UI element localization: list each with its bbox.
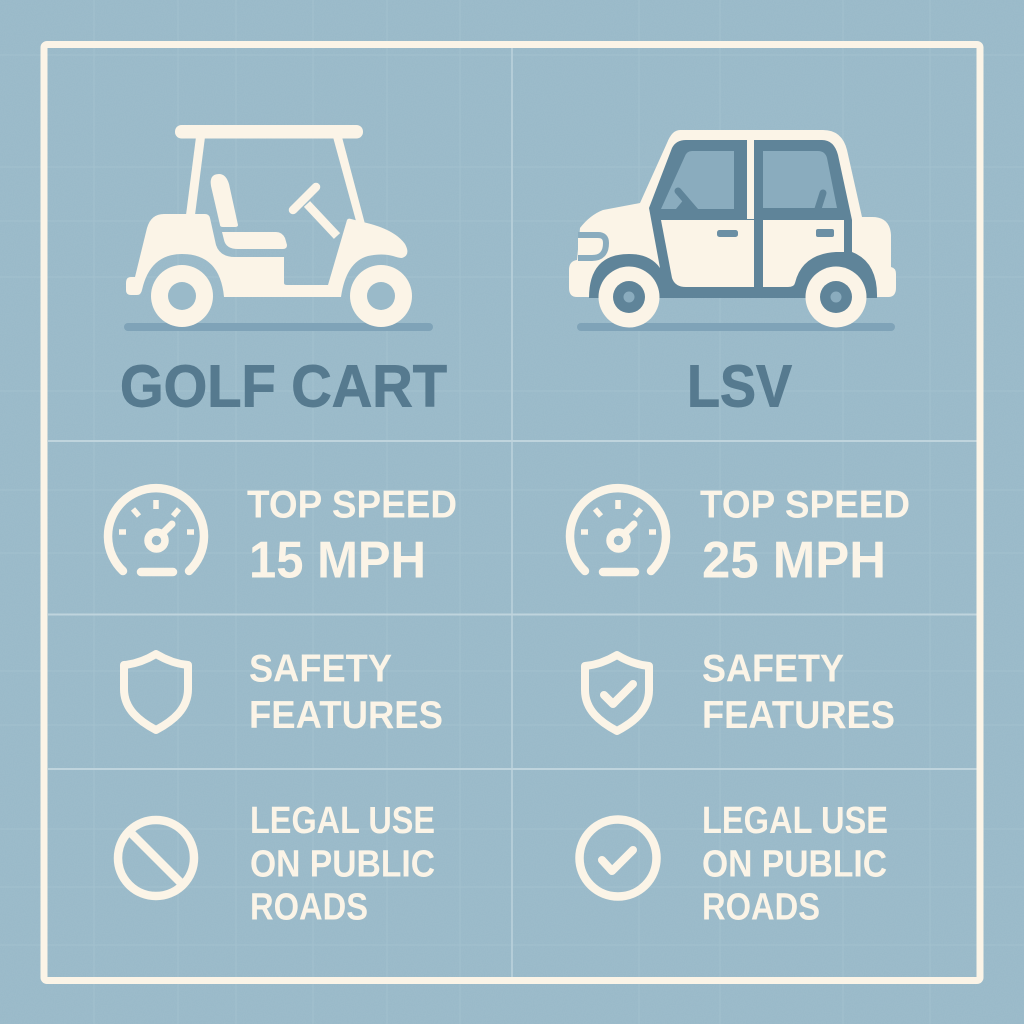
panel: LSV header xyxy=(569,130,896,420)
label: legal use on public roads: ON PUBLIC xyxy=(250,844,435,886)
label: safety features: SAFETY xyxy=(702,648,844,690)
icon: shield with check xyxy=(585,655,649,731)
label: legal use on public roads: ROADS xyxy=(250,886,368,928)
panel: LSV safety features xyxy=(585,648,895,737)
icon: prohibited sign xyxy=(118,820,194,896)
label: legal use on public roads: LEGAL USE xyxy=(702,800,888,842)
value: 25 mph: 25 MPH xyxy=(702,532,886,590)
label: safety features: SAFETY xyxy=(249,648,392,690)
panel: golf cart legal use xyxy=(118,800,435,928)
label: safety features: FEATURES xyxy=(702,694,895,737)
label: legal use on public roads: ON PUBLIC xyxy=(702,844,887,886)
label: legal use on public roads: LEGAL USE xyxy=(250,800,435,842)
panel: golf cart header xyxy=(120,125,447,420)
heading: LSV: LSV xyxy=(687,354,792,420)
icon: LSV car xyxy=(569,130,896,331)
icon: speedometer xyxy=(570,488,666,572)
icon: empty shield xyxy=(124,654,188,730)
panel: LSV legal use xyxy=(580,800,888,928)
icon: golf cart xyxy=(124,125,433,331)
panel: LSV top speed xyxy=(570,484,910,590)
label: safety features: FEATURES xyxy=(249,694,443,737)
value: 15 mph: 15 MPH xyxy=(249,532,426,590)
heading: golf cart: GOLF CART xyxy=(120,354,447,420)
panel: golf cart top speed xyxy=(108,484,457,590)
label: legal use on public roads: ROADS xyxy=(702,886,820,928)
icon: speedometer xyxy=(108,488,204,572)
icon: circle with check xyxy=(580,820,656,896)
label: top speed: TOP SPEED xyxy=(700,484,910,526)
panel: golf cart safety features xyxy=(124,648,443,737)
label: top speed: TOP SPEED xyxy=(247,484,457,526)
